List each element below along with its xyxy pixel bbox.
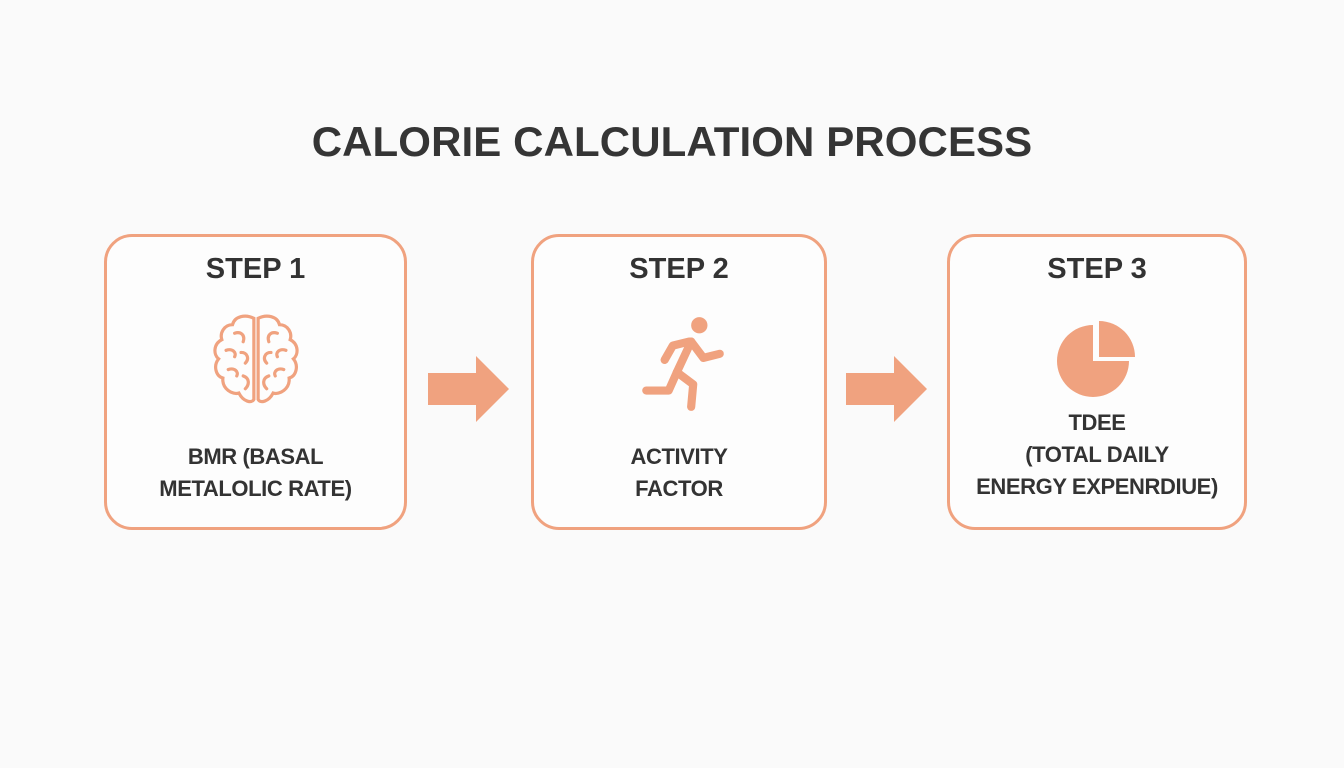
panel: step 1 [104, 234, 407, 530]
text: TDEE: TDEE [1068, 410, 1126, 435]
text: activity factor: ACTIVITY [630, 444, 728, 469]
panel: step 3 [947, 234, 1247, 530]
text: BMR: BMR (BASAL [188, 444, 323, 469]
arrow 1 [428, 356, 509, 422]
panel: step 2 [531, 234, 827, 530]
text: activity factor [630, 444, 728, 501]
heading: step 2: STEP 2 [629, 253, 729, 285]
text: TDEE: (TOTAL DAILY [1025, 442, 1169, 467]
icon: pie chart [1057, 321, 1135, 397]
text: TDEE: ENERGY EXPENRDIUE) [976, 474, 1218, 499]
heading: step 1: STEP 1 [206, 253, 305, 285]
icon: brain [213, 314, 299, 404]
text: activity factor: FACTOR [635, 476, 723, 501]
arrow 2 [846, 356, 927, 422]
heading: step 3: STEP 3 [1047, 253, 1147, 285]
title: CALORIE CALCULATION PROCESS [312, 118, 1032, 165]
text: BMR: METALOLIC RATE) [159, 476, 352, 501]
icon: runner [642, 317, 724, 411]
text: BMR [159, 444, 352, 501]
text: TDEE [976, 410, 1218, 499]
